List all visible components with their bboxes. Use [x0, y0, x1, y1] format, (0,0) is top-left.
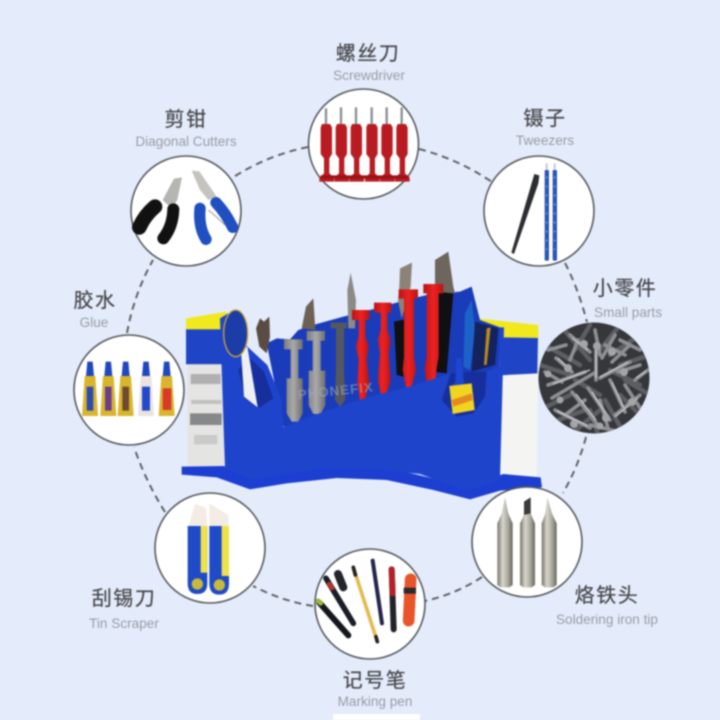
item: soldering iron tip: Soldering iron tip: [556, 612, 658, 627]
left pocket hollow: [238, 357, 273, 408]
icon: pens: [318, 561, 416, 642]
label: 刮锡刀: [92, 587, 156, 610]
left pocket back: [220, 313, 283, 468]
right drawer tower: [478, 318, 538, 479]
circle: [484, 156, 594, 266]
icon: tweezers: [511, 163, 557, 261]
item: glue: [74, 289, 184, 445]
right pocket tools: [463, 300, 498, 372]
front face: [225, 327, 504, 491]
item: tweezers: [484, 107, 594, 266]
item: marking pen: Marking pen: [338, 694, 412, 709]
watermark: PHONEFIX: [297, 379, 374, 402]
central product: blue tool organizer: [182, 252, 542, 499]
item: tin scraper: [89, 493, 265, 631]
back wall: [267, 287, 500, 427]
item: screwdriver: Screwdriver: [333, 68, 405, 83]
item: small parts: [538, 277, 662, 440]
black handles: [394, 292, 453, 378]
item: soldering iron tip: [472, 487, 658, 627]
label: 镊子: [524, 107, 566, 130]
item: diagonal cutters: Diagonal Cutters: [135, 134, 237, 149]
label: 剪钳: [164, 108, 208, 131]
icon: scrapers: [188, 503, 229, 595]
circle: [131, 156, 241, 266]
label: 记号笔: [343, 669, 407, 692]
circle: [155, 493, 265, 603]
circle: [315, 549, 425, 659]
glue bottle: [449, 358, 475, 414]
item: tweezers: Tweezers: [516, 133, 574, 148]
base tray: [182, 463, 542, 499]
label: 胶水: [74, 289, 116, 312]
gray bit holders: [284, 323, 347, 422]
left drawer tower: [186, 312, 227, 468]
circle: [472, 487, 582, 597]
item: glue: Glue: [80, 315, 108, 330]
icon: cutters: [139, 171, 233, 239]
right pocket hollow: [442, 372, 487, 417]
glue tube and label badge: [224, 310, 258, 407]
red screwdrivers: [352, 284, 443, 400]
cutter tips: [256, 252, 455, 353]
label: 小零件: [593, 277, 657, 300]
icon: soldering tips: [497, 497, 557, 587]
white strip at bottom: [333, 714, 420, 720]
icon: glue tubes: [82, 362, 175, 416]
item: small parts: Small parts: [594, 305, 662, 320]
circle: [74, 335, 184, 445]
dashed connector ring: [127, 147, 587, 606]
item: screwdriver: [308, 42, 418, 199]
label: 螺丝刀: [336, 42, 400, 65]
item: diagonal cutters: [131, 108, 241, 266]
circle: [308, 89, 418, 199]
circle of screws: [538, 322, 650, 440]
item: marking pen: [315, 549, 425, 709]
label: 烙铁头: [575, 584, 639, 607]
icon: screwdrivers: [319, 107, 410, 182]
item: tin scraper: Tin Scraper: [89, 616, 159, 631]
